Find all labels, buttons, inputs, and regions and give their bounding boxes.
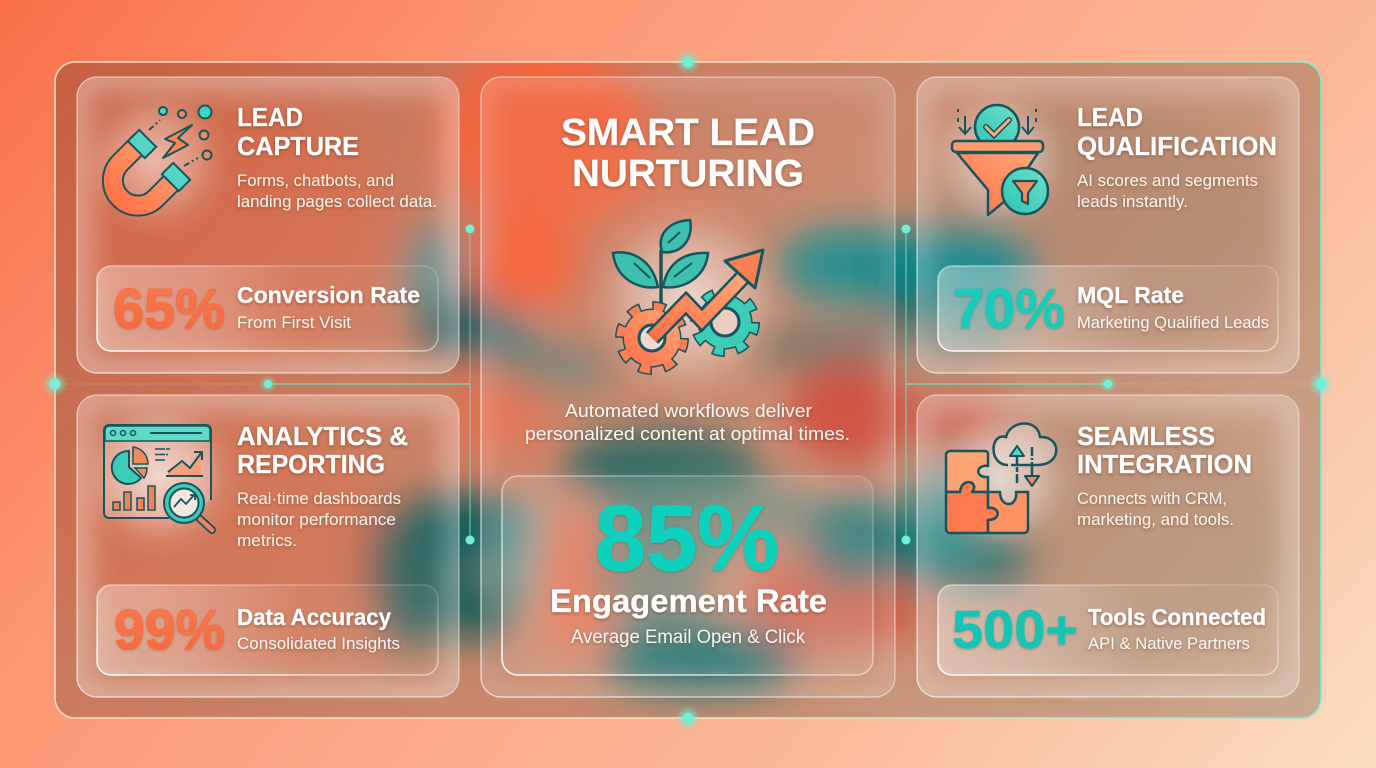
description: smart lead nurturing: Automated workflows deliver xyxy=(565,400,812,421)
description: lead qualification xyxy=(1077,172,1258,211)
panel: seamless integration xyxy=(917,395,1299,697)
description: analytics and reporting: metrics. xyxy=(237,532,297,550)
description: lead qualification: leads instantly. xyxy=(1077,193,1188,211)
stat: 500+ tools connected: Tools Connected xyxy=(1088,604,1266,630)
description: lead capture: landing pages collect data. xyxy=(237,193,437,211)
heading: lead qualification: QUALIFICATION xyxy=(1077,131,1277,161)
icon: analytics dashboard xyxy=(104,425,212,530)
icon: puzzle and cloud xyxy=(946,423,1056,533)
stat: 500+ tools connected: API & Native Partners xyxy=(1088,635,1250,653)
stat: 70% MQL rate: Marketing Qualified Leads xyxy=(1077,314,1269,332)
stat: 85% engagement rate: 85% xyxy=(595,486,779,590)
stat: 85% engagement rate: Engagement Rate xyxy=(550,583,827,619)
connector lines xyxy=(55,229,1321,540)
panel: lead qualification xyxy=(917,77,1299,373)
heading: analytics and reporting: ANALYTICS & xyxy=(237,421,408,451)
stat: 70% MQL rate: 70% xyxy=(953,277,1065,341)
icon: magnet xyxy=(113,106,212,206)
stat: 500+ tools connected: 500+ xyxy=(952,600,1078,660)
icon: funnel xyxy=(952,105,1048,215)
description: lead qualification: AI scores and segments xyxy=(1077,172,1258,190)
stat: 65% conversion rate xyxy=(97,266,438,351)
stat: 65% conversion rate: 65% xyxy=(113,277,225,341)
heading: lead capture: LEAD xyxy=(237,102,303,132)
stat: 99% data accuracy: Consolidated Insights xyxy=(237,635,400,653)
description: seamless integration xyxy=(1077,490,1234,529)
heading: lead qualification xyxy=(1077,102,1277,161)
panel: lead capture xyxy=(75,77,459,373)
title xyxy=(561,112,815,195)
heading: analytics and reporting xyxy=(237,421,408,479)
description: analytics and reporting: monitor performance xyxy=(237,511,396,529)
heading: seamless integration xyxy=(1077,421,1252,479)
description: seamless integration: Connects with CRM, xyxy=(1077,490,1227,508)
icon: plant, gears and growth arrow xyxy=(613,220,763,369)
panel: analytics and reporting xyxy=(73,390,459,697)
stat: 70% MQL rate: MQL Rate xyxy=(1077,282,1184,308)
heading: seamless integration: INTEGRATION xyxy=(1077,449,1252,479)
stat: 99% data accuracy: 99% xyxy=(114,598,225,662)
description: analytics and reporting xyxy=(237,490,401,550)
heading: seamless integration: SEAMLESS xyxy=(1077,421,1215,451)
stat: 85% engagement rate xyxy=(502,476,873,675)
description: smart lead nurturing xyxy=(525,400,850,444)
stat: 70% MQL rate xyxy=(938,266,1278,351)
description: smart lead nurturing: personalized content at optimal times. xyxy=(525,423,850,444)
description: seamless integration: marketing, and tools. xyxy=(1077,511,1234,529)
panel: smart lead nurturing xyxy=(481,77,895,697)
heading: lead capture xyxy=(237,102,359,161)
stat: 99% data accuracy: Data Accuracy xyxy=(237,604,391,630)
description: lead capture: Forms, chatbots, and xyxy=(237,172,394,190)
stat: 85% engagement rate: Average Email Open & Click xyxy=(571,627,805,648)
stat: 65% conversion rate: Conversion Rate xyxy=(237,282,420,308)
title: NURTURING xyxy=(572,153,804,195)
heading: analytics and reporting: REPORTING xyxy=(237,449,385,479)
title: SMART LEAD xyxy=(561,112,815,154)
description: lead capture xyxy=(237,172,437,211)
heading: lead capture: CAPTURE xyxy=(237,131,359,161)
description: analytics and reporting: Real·time dashboards xyxy=(237,490,401,508)
stat: 500+ tools connected xyxy=(938,585,1278,675)
stat: 99% data accuracy xyxy=(97,585,438,675)
heading: lead qualification: LEAD xyxy=(1077,102,1143,132)
stat: 65% conversion rate: From First Visit xyxy=(237,314,351,332)
